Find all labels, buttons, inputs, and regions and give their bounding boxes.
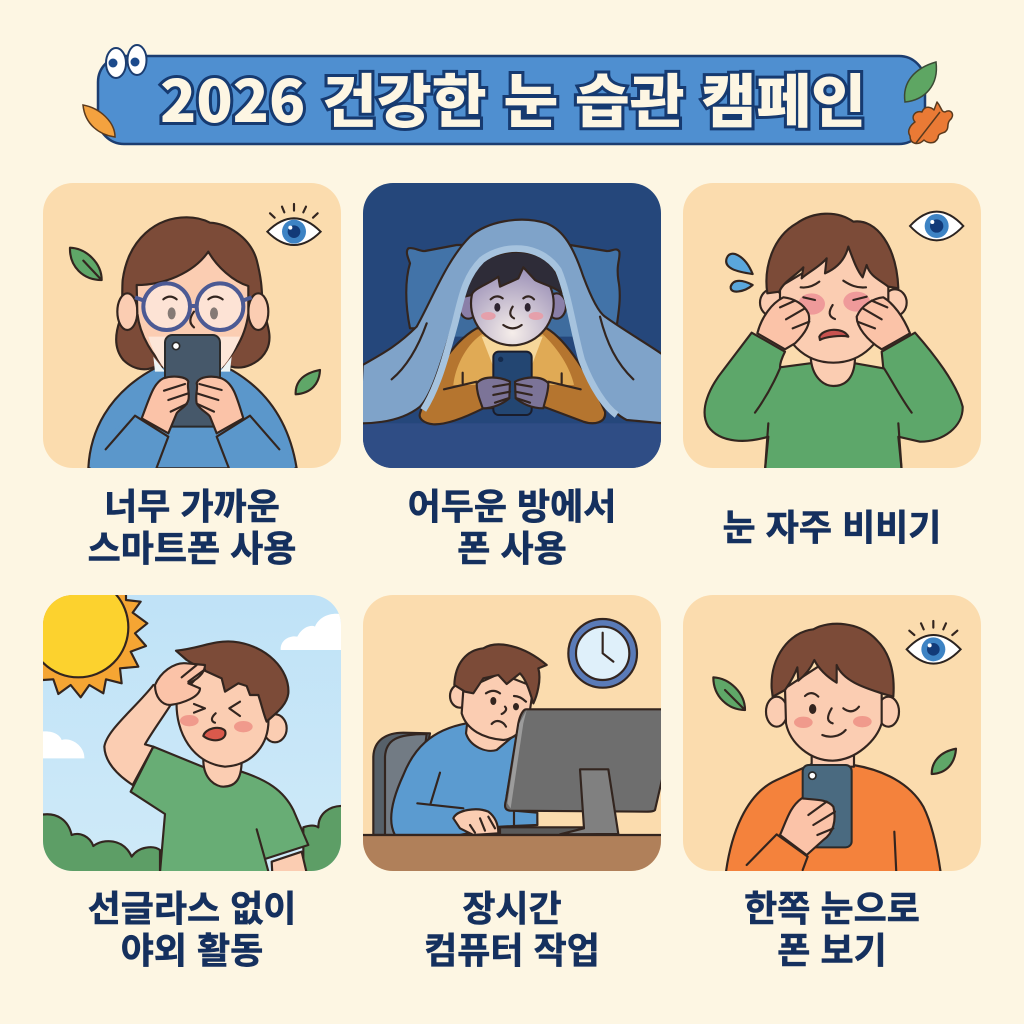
panel background [360,180,667,477]
figure: boy shading eyes [104,641,308,880]
label: phone too close: 너무 가까운 [104,478,280,530]
title banner [83,45,952,144]
label: long computer work: 컴퓨터 작업 [424,922,600,974]
icon: autumn leaf [909,102,952,143]
bushes [43,804,341,871]
label: phone too close: 스마트폰 사용 [88,520,296,572]
computer monitor [500,709,665,835]
panel background [360,590,667,877]
icon: sun [43,595,148,698]
panel: rubbing eyes [680,180,987,477]
icon: leaf right [296,370,320,394]
figure: boy at computer [391,644,547,835]
label: one eye on phone: 폰 보기 [777,922,887,974]
label: no sunglasses outdoors: 선글라스 없이 [88,880,296,932]
office chair [373,733,430,835]
panel: no sunglasses outdoors [43,595,341,871]
bed [363,424,661,468]
icon: clouds [40,614,345,758]
desk [363,834,661,871]
label: rubbing eyes: 눈 자주 비비기 [723,499,941,551]
figure: boy rubbing eyes [705,214,963,470]
phone [803,765,852,847]
figure: woman with glasses [88,217,297,470]
icon: peeking eyes [106,45,146,78]
figure: boy winking [725,624,942,880]
icon: eye [907,621,961,664]
blanket [360,220,663,423]
icon: eye [267,204,321,245]
figure: child under blanket [420,245,605,424]
label: one eye on phone: 한쪽 눈으로 [744,880,920,932]
icon: wall clock [568,619,637,688]
panel background [680,180,987,477]
label: long computer work: 장시간 [462,880,562,932]
label: no sunglasses outdoors: 야외 활동 [121,922,263,974]
panel: phone in dark room [360,180,667,477]
icon: leaf right [932,749,956,774]
sky background [40,590,347,877]
pillow [406,245,620,328]
label: phone in dark room: 어두운 방에서 [408,478,616,530]
panel background [680,590,987,877]
icon: orange leaf [83,105,115,137]
title text: 2026 건강한 눈 습관 캠페인 [160,55,866,139]
icon: eye [910,212,963,240]
banner ribbon [98,56,925,144]
icon: leaf left [713,677,745,710]
glasses [135,283,252,330]
icon: leaf left [70,248,102,280]
panel: long computer work [360,590,667,880]
panel: one eye on phone [680,590,987,880]
icon: tear drops [726,254,753,292]
panel: phone too close [40,180,350,477]
icon: green leaf [905,62,936,102]
panel background [40,180,350,477]
phone [493,352,532,415]
phone [165,335,220,427]
label: phone in dark room: 폰 사용 [457,520,567,572]
